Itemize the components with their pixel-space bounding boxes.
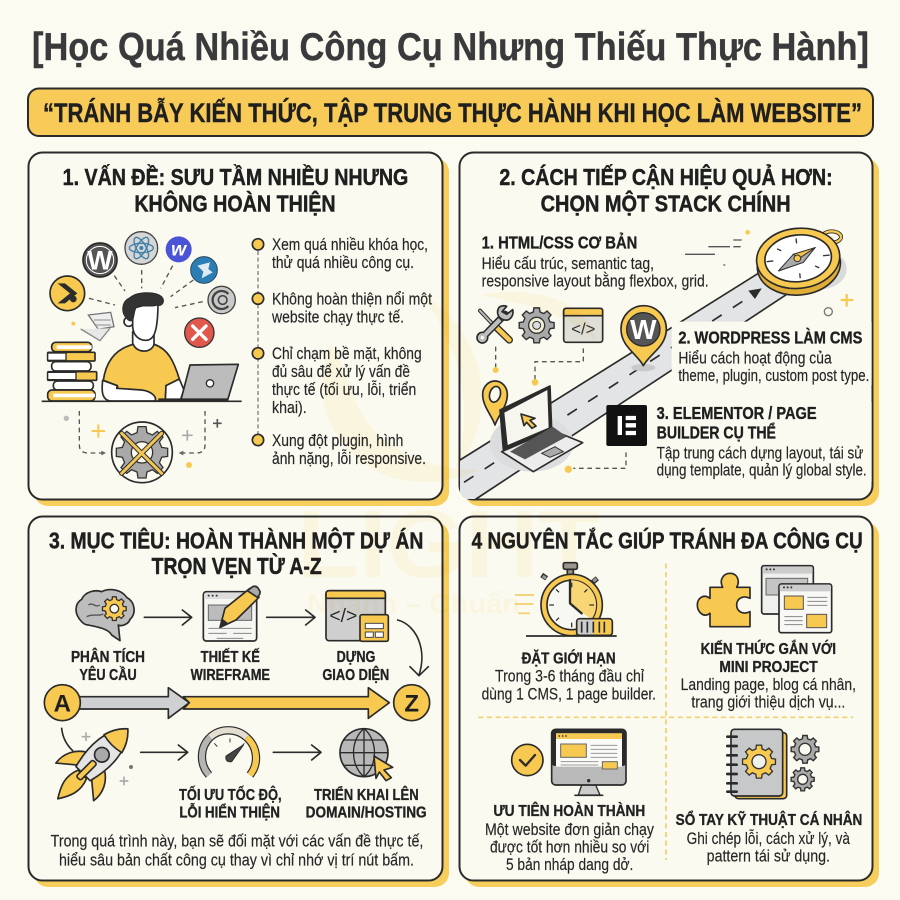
label: optimize: TỐI ƯU TỐC ĐỘ, — [179, 784, 282, 804]
icon: tools, gear and code window: </> — [571, 319, 595, 338]
icon: globe with cursor — [340, 729, 393, 781]
list: problem bullets: Chỉ chạm bề mặt, không — [272, 344, 422, 363]
panel: approach — [460, 152, 879, 506]
text: mini project: Landing page, blog cá nhân, — [681, 675, 856, 694]
text: set limits: ĐẶT GIỚI HẠN — [522, 648, 616, 667]
heading: panel 3 — [49, 527, 423, 579]
text: step 1 HTML/CSS: responsive layout bằng flexbox, grid. — [482, 272, 709, 291]
label: wireframe: THIẾT KẾ — [201, 647, 260, 666]
list: problem bullets: thực tế (tối ưu, lỗi, triển — [272, 380, 416, 399]
illustration: crossed-out gear — [64, 411, 222, 483]
illustration: tool icons around learner — [50, 232, 235, 347]
icon: brain — [76, 590, 134, 641]
icon: location pin and laptop — [483, 381, 583, 472]
label: deploy: TRIỂN KHAI LÊN — [314, 785, 419, 804]
label: build interface — [322, 649, 389, 684]
text: step 2 WordPress — [678, 327, 869, 385]
panel: goal A-Z — [28, 516, 449, 887]
icon: code window — [326, 591, 388, 641]
arrow — [273, 745, 321, 760]
text: mini project — [681, 639, 856, 711]
icon: speed gauge — [202, 730, 256, 775]
list: problem bullets: Xem quá nhiều khóa học, — [272, 235, 428, 254]
text: set limits: dùng 1 CMS, 1 page builder. — [482, 684, 656, 703]
icon: WordPress map pin — [621, 306, 666, 371]
panel: four principles — [460, 516, 879, 887]
icon: rocket — [39, 710, 147, 818]
label: optimize: LỖI HIỂN THIỆN — [179, 802, 280, 821]
heading: panel 1: 1. VẤN ĐỀ: SƯU TẦM NHIỀU NHƯNG — [63, 164, 408, 190]
illustration: tool icons around learner: w — [171, 240, 188, 261]
text: set limits: Trong 3-6 tháng đầu chỉ — [495, 667, 644, 686]
list: problem bullets: website chạy thực tế. — [271, 308, 404, 327]
text: mini project: KIẾN THỨC GẮN VỚI — [701, 639, 836, 658]
heading: panel 2: 2. CÁCH TIẾP CẬN HIỆU QUẢ HƠN: — [499, 164, 833, 190]
watermark: LIGHT logo: Nhanh – Chuẩn — [307, 588, 520, 619]
illustration: learner at laptop — [102, 293, 238, 401]
text: step 3 Elementor: 3. ELEMENTOR / PAGE — [657, 403, 817, 423]
heading: panel 2: CHỌN MỘT STACK CHÍNH — [541, 191, 791, 217]
watermark: LIGHT logo: LIGHT — [297, 491, 600, 598]
label: deploy: DOMAIN/HOSTING — [306, 804, 427, 821]
icon: tools, gear and code window — [477, 306, 603, 386]
text: step 3 Elementor — [657, 403, 867, 480]
heading: panel 3: TRỌN VẸN TỪ A-Z — [152, 553, 322, 579]
arrow — [144, 610, 192, 625]
label: wireframe — [191, 647, 270, 684]
label: requirements: YÊU CẦU — [79, 665, 137, 684]
panel: problem — [28, 152, 449, 506]
text: personal notebook — [676, 809, 862, 865]
text: step 3 Elementor: BUILDER CỤ THỂ — [657, 422, 776, 442]
icon: wireframe with pencil — [203, 586, 260, 641]
watermark: LIGHT logo — [297, 290, 600, 619]
timeline: A to Z arrows — [44, 685, 430, 721]
label: deploy — [306, 785, 427, 821]
text: personal notebook: pattern tái sử dụng. — [707, 846, 830, 865]
text: prioritize finishing: được tốt hơn nhiều so với — [490, 837, 649, 856]
list: problem bullets: thử quá nhiều công cụ. — [272, 253, 414, 272]
list: problem bullets — [252, 235, 432, 468]
banner: key message — [28, 88, 873, 136]
icon: puzzle and browser windows — [697, 566, 832, 633]
text: set limits — [482, 648, 656, 703]
illustration: road — [460, 273, 872, 499]
list: problem bullets: khai). — [272, 398, 307, 417]
text: step 1 HTML/CSS — [482, 233, 709, 291]
text: personal notebook: SỔ TAY KỸ THUẬT CÁ NHÂN — [676, 809, 862, 829]
illustration: stack of books — [42, 342, 242, 401]
label: optimize — [179, 784, 282, 821]
icon: compass — [685, 224, 853, 316]
text: summary: Trong quá trình này, bạn sẽ đối mặt với các vấn đề thực tế, — [51, 832, 423, 851]
heading: panel 2 — [499, 164, 833, 217]
text: mini project: trang giới thiệu dịch vụ... — [691, 692, 845, 711]
icon: notebook and gears — [727, 729, 819, 799]
arrow: to Z — [398, 620, 428, 676]
text: prioritize finishing — [485, 801, 655, 874]
label: build interface: DỰNG — [337, 649, 375, 666]
icon: WordPress map pin: W — [630, 314, 657, 345]
text: step 1 HTML/CSS: 1. HTML/CSS CƠ BẢN — [482, 233, 637, 253]
label: requirements: PHÂN TÍCH — [71, 647, 145, 666]
heading: panel 1 — [63, 164, 408, 217]
list: problem bullets: đủ sâu để xử lý vấn đề — [272, 362, 410, 381]
timeline: A to Z arrows: Z — [404, 690, 419, 717]
text: step 1 HTML/CSS: Hiểu cấu trúc, semantic tag, — [482, 254, 654, 273]
label: build interface: GIAO DIỆN — [322, 665, 389, 684]
icon: check and monitor — [512, 729, 626, 795]
text: mini project: MINI PROJECT — [719, 659, 818, 676]
list: problem bullets: Không hoàn thiện nổi một — [272, 290, 432, 309]
heading: panel 3: 3. MỤC TIÊU: HOÀN THÀNH MỘT DỰ ÁN — [49, 527, 423, 553]
list: problem bullets: Xung đột plugin, hình — [272, 431, 403, 450]
text: summary — [51, 832, 423, 870]
illustration: tool icons around learner: W — [87, 245, 113, 275]
arrow — [141, 745, 188, 760]
list: problem bullets: ảnh nặng, lỗi responsive. — [272, 449, 426, 468]
text: step 2 WordPress: 2. WORDPRESS LÀM CMS — [678, 327, 862, 347]
heading: panel 1: KHÔNG HOÀN THIỆN — [134, 191, 336, 217]
icon: code window: </> — [329, 606, 357, 627]
text: prioritize finishing: Một website đơn giản chạy — [485, 820, 655, 839]
label: requirements — [71, 647, 145, 684]
label: wireframe: WIREFRAME — [191, 667, 270, 684]
arrow — [267, 610, 315, 625]
text: summary: hiểu sâu bản chất công cụ thay vì chỉ nhớ vị trí nút bấm. — [59, 851, 414, 870]
icon: stopwatch — [515, 563, 617, 636]
timeline: A to Z arrows: A — [54, 690, 71, 717]
icon: Elementor — [565, 405, 647, 473]
text: prioritize finishing: ƯU TIÊN HOÀN THÀNH — [493, 801, 645, 820]
text: prioritize finishing: 5 bản nháp dang dở. — [506, 855, 633, 874]
text: personal notebook: Ghi chép lỗi, cách xử lý, và — [687, 829, 851, 848]
text: step 2 WordPress: Hiểu cách hoạt động của — [678, 348, 832, 367]
